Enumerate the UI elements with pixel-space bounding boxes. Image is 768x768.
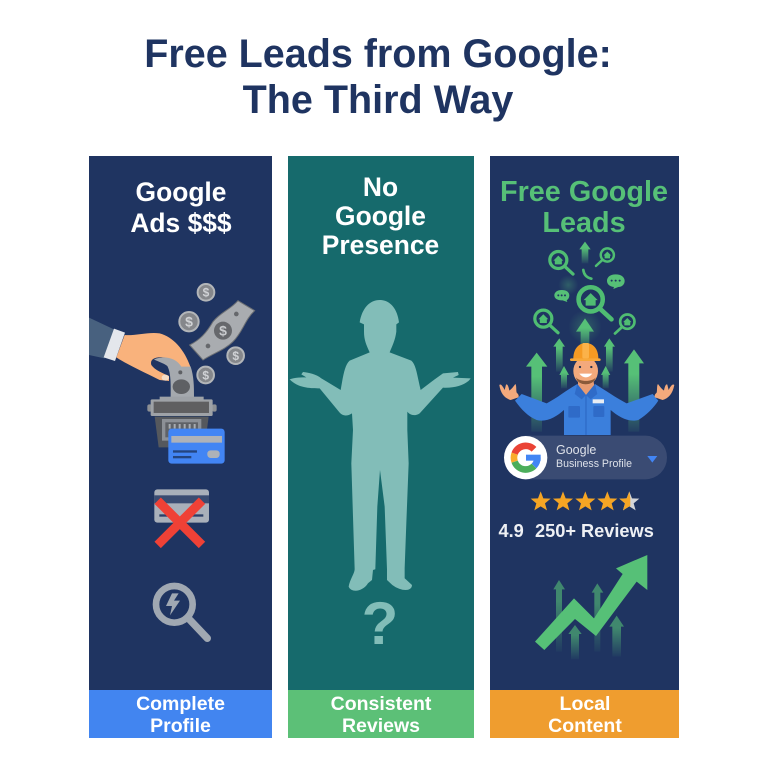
icon: shredder xyxy=(147,397,217,447)
icon: banknote entering slot xyxy=(154,357,194,398)
illustration: hand feeding money into shredder xyxy=(89,284,255,464)
badge text: Google xyxy=(556,443,596,457)
badge text xyxy=(556,443,632,470)
icon: crossed-out credit card xyxy=(154,489,209,545)
icon: coins xyxy=(179,284,244,383)
footer: Consistent Reviews: Reviews xyxy=(342,715,420,737)
icon: magnifier with lightning bolt xyxy=(156,586,207,638)
footer: Complete Profile: Complete xyxy=(136,693,225,715)
icon: phone xyxy=(583,270,591,279)
panel: No Google Presence xyxy=(288,156,474,738)
title: The Third Way xyxy=(243,78,513,122)
rating text: 250+ Reviews xyxy=(535,521,654,541)
icon: flying banknote xyxy=(190,301,255,360)
icon: dropdown triangle xyxy=(647,456,657,463)
heading: No Google Presence: Presence xyxy=(322,230,439,260)
heading: Free Google Leads: Leads xyxy=(542,207,626,239)
footer: Consistent Reviews: Consistent xyxy=(331,693,432,715)
icon: rising growth arrow xyxy=(535,555,647,659)
panel: Free Google Leads xyxy=(490,156,679,738)
heading: No Google Presence: No xyxy=(363,172,398,202)
icon: magnifiers with houses xyxy=(535,248,634,333)
title xyxy=(144,32,612,122)
icon: worker in blue uniform xyxy=(499,343,674,435)
illustration: worker with rising leads xyxy=(499,242,674,435)
heading: Google Ads xyxy=(130,177,232,238)
footer: Local Content: Content xyxy=(548,715,622,737)
badge: Google Business Profile xyxy=(504,436,667,479)
heading: No Google Presence: Google xyxy=(335,201,426,231)
icon: rising green arrows xyxy=(526,242,644,432)
icon: flying banknote: $ xyxy=(219,323,227,339)
footer: Complete Profile xyxy=(89,690,272,738)
icon: suit sleeve and hand xyxy=(89,318,190,381)
heading: Free Google Leads xyxy=(500,176,668,239)
icon: Google G logo xyxy=(514,446,541,469)
heading: Google Ads: Google xyxy=(136,177,226,207)
icon: coins: $ xyxy=(232,349,239,363)
footer: Local Content xyxy=(490,690,679,738)
rating text: 4.9 xyxy=(498,521,524,541)
footer: Complete Profile: Profile xyxy=(150,715,211,737)
badge text: Business Profile xyxy=(556,458,632,470)
footer: Local Content: Local xyxy=(560,693,610,715)
star rating xyxy=(531,491,639,510)
icon: coins: $ xyxy=(185,314,193,330)
icon: coins: $ xyxy=(203,286,210,300)
panel: Google Ads xyxy=(89,156,272,738)
icon: worker silhouette shrugging xyxy=(290,300,471,591)
title: Free Leads from Google: xyxy=(144,32,612,76)
icon: question mark: ? xyxy=(362,590,398,657)
icon: chat bubbles xyxy=(554,274,625,302)
heading: No Google Presence xyxy=(322,172,439,260)
icon: coins: $ xyxy=(202,368,209,382)
icon: blue credit card xyxy=(168,429,225,464)
footer: Consistent Reviews xyxy=(288,690,474,738)
heading: Free Google Leads: Free Google xyxy=(500,176,668,208)
heading: Google Ads: Ads $$$ xyxy=(130,208,232,238)
